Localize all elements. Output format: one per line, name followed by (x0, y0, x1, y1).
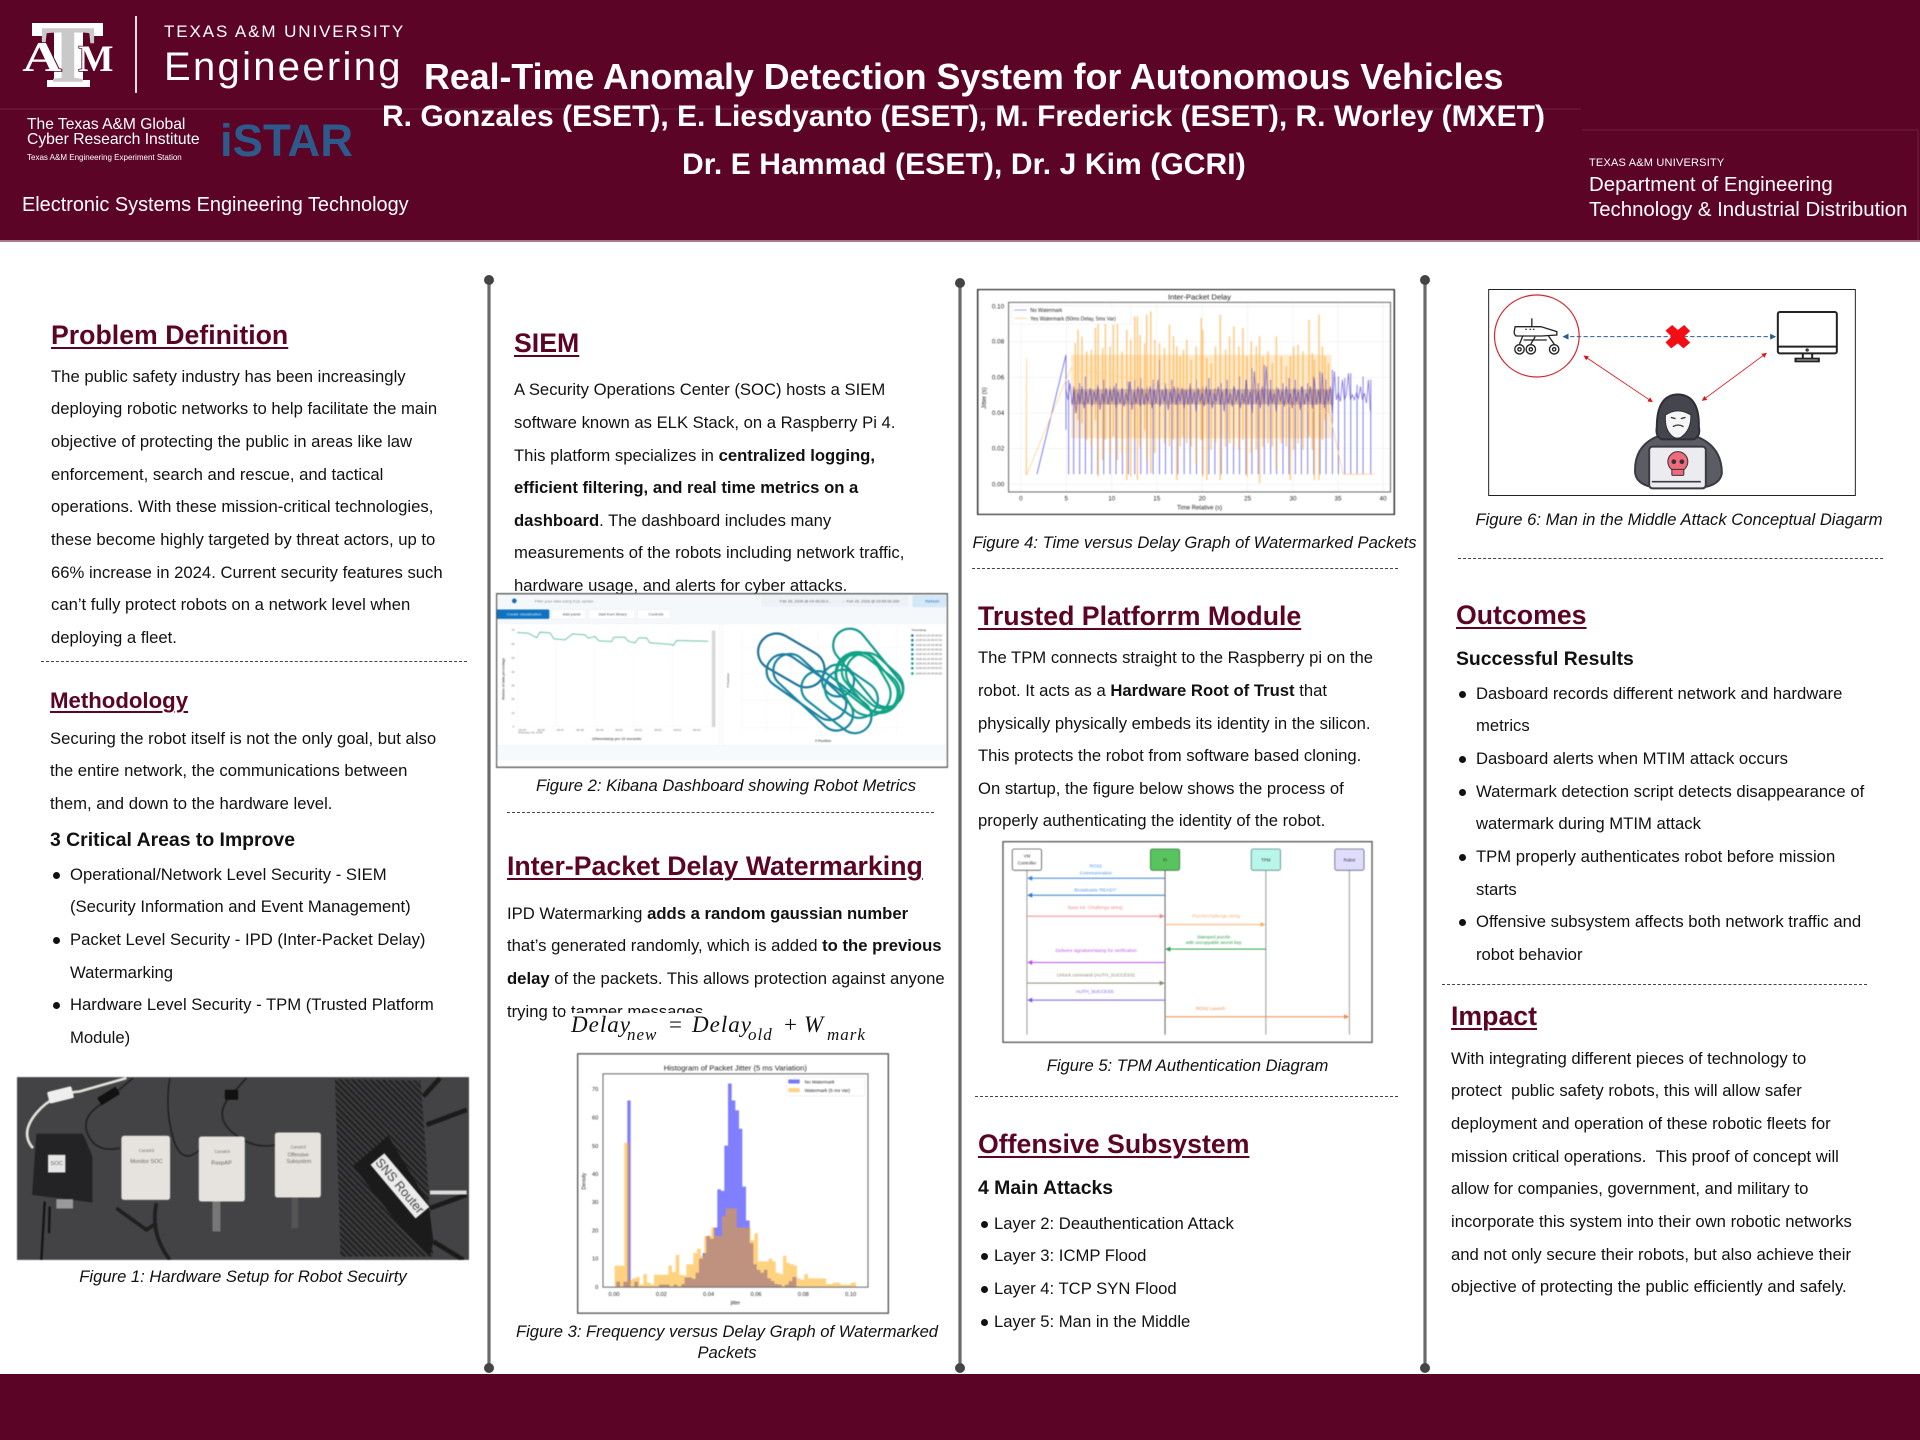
dashboard screenshot: 2026-02-26 09:53:00 (916, 666, 942, 670)
body text: properly authenticating the identity of the robot. (978, 811, 1325, 830)
dashboard screenshot: 09:53 (674, 728, 681, 732)
dashboard screenshot: @timestamp per 10 seconds (592, 737, 641, 741)
body text: 66% increase in 2024. Current security features such (51, 563, 443, 582)
panel: problem definition (51, 320, 443, 647)
icon: monitor (1778, 312, 1837, 361)
dashboard screenshot: February 26, 2026 (518, 730, 543, 734)
body text: efficient filtering, and real time metrics on a (514, 478, 858, 497)
bullet list (53, 865, 434, 1047)
bullet list: starts (1476, 880, 1517, 899)
dashboard screenshot: Feb 26, 2026 @ 09:45:00.0... (780, 599, 832, 604)
dashboard screenshot: 2026-02-26 09:49:00 (916, 648, 942, 652)
body text: operations. With these mission-critical technologies, (51, 497, 433, 516)
heading: Impact (1451, 1001, 1537, 1031)
histogram chart: jitter (730, 1300, 740, 1306)
body text: The public safety industry has been increasingly (51, 367, 406, 386)
equation: old (748, 1025, 773, 1044)
arrow: attacker to monitor (1702, 353, 1766, 400)
bullet list: Watermark detection script detects disappearance of (1476, 782, 1864, 801)
line chart: 35 (1335, 495, 1342, 502)
body text: deployment and operation of these robotic fleets for (1451, 1114, 1831, 1133)
department line: Electronic Systems Engineering Technology (22, 194, 409, 216)
global cyber research institute (27, 116, 200, 162)
bullet list (981, 1214, 1234, 1331)
body text: incorporate this system into their own robotic networks (1451, 1212, 1852, 1231)
photo of hardware: RaspAP (211, 1160, 232, 1166)
line chart: Jitter (s) (982, 387, 988, 409)
dashboard screenshot: 2026-02-26 09:51:00 (916, 657, 942, 661)
dashboard screenshot: 70 (511, 628, 515, 632)
body text (514, 380, 904, 595)
equation: new (627, 1025, 657, 1044)
sequence diagram: Broadcasts 'READY' (1074, 888, 1117, 893)
dashboard screenshot: 09:51 (635, 728, 642, 732)
dashboard screenshot: Refresh (925, 599, 939, 604)
line chart: 0.06 (992, 374, 1005, 381)
body text: protect public safety robots, this will allow safer (1451, 1081, 1802, 1100)
dashboard screenshot: Median of data percentage (502, 658, 506, 700)
sequence diagram: Robot (1344, 857, 1356, 862)
figure 6: man in the middle diagram (1475, 289, 1883, 529)
dashboard screenshot: 0 (513, 724, 515, 728)
figure 5: TPM authentication sequence diagram (1002, 840, 1374, 1075)
photo of hardware: CanaKit (139, 1148, 155, 1153)
body text: deploying robotic networks to help facilitate the main (51, 399, 437, 418)
dashboard screenshot: 09:52 (654, 728, 662, 732)
logo: Texas A&M: M (79, 39, 113, 80)
histogram chart: 0.00 (608, 1292, 620, 1298)
bullet list: Watermarking (70, 963, 173, 982)
dashboard screenshot: Create visualization (507, 612, 541, 617)
body text: With integrating different pieces of technology to (1451, 1049, 1806, 1068)
sequence diagram: VM (1024, 854, 1031, 859)
caption: Figure 4: Time versus Delay Graph of Watermarked Packets (972, 533, 1417, 552)
photo of hardware: CanaKit (214, 1149, 231, 1154)
bullet list: Layer 5: Man in the Middle (994, 1312, 1190, 1331)
heading: SIEM (514, 328, 579, 358)
dashboard screenshot: 09:50 (615, 728, 623, 732)
body text: physically physically embeds its identity in the silicon. (978, 714, 1371, 732)
dashboard screenshot: 30 (511, 683, 515, 687)
histogram chart: 10 (592, 1256, 598, 1262)
icon: hooded attacker with laptop (1635, 394, 1722, 488)
histogram chart: 40 (592, 1172, 598, 1178)
line chart: 20 (1199, 495, 1206, 502)
dashboard screenshot: Add from library (599, 612, 627, 617)
line chart: 40 (1380, 495, 1387, 502)
bullet list: Operational/Network Level Security - SIEM (70, 865, 387, 884)
caption: Figure 6: Man in the Middle Attack Conceptual Diagarm (1475, 510, 1883, 529)
photo of hardware: SOC (51, 1161, 63, 1167)
figure 2: kibana dashboard (495, 592, 949, 795)
histogram chart: 50 (592, 1144, 598, 1150)
dashboard screenshot: 20 (511, 697, 515, 701)
sequence diagram: Controller (1018, 861, 1037, 866)
line chart: 0.08 (992, 339, 1005, 346)
body text: enforcement, search and rescue, and tactical (51, 465, 383, 484)
dashboard screenshot: 2026-02-26 09:50:00 (916, 652, 942, 656)
dashboard screenshot: 09:45 (519, 728, 526, 732)
body text: A Security Operations Center (SOC) hosts a SIEM (514, 380, 885, 399)
caption: Figure 3: Frequency versus Delay Graph of Watermarked (516, 1322, 938, 1341)
heading: Inter-Packet Delay Watermarking (507, 851, 923, 881)
caption: Figure 5: TPM Authentication Diagram (1047, 1056, 1328, 1075)
sequence diagram: Communication (1080, 870, 1112, 875)
panel: SIEM (514, 328, 904, 595)
body text (507, 904, 945, 1021)
bullet list (1459, 684, 1864, 964)
histogram chart: Watermark (5 ms Var) (805, 1088, 850, 1093)
heading: Outcomes (1456, 600, 1587, 630)
histogram chart: No Watermark (805, 1080, 835, 1084)
line chart: 0.10 (992, 303, 1005, 310)
body text: and not only secure their robots, but also achieve their (1451, 1245, 1851, 1264)
column divider 2 (955, 278, 965, 1373)
body text: IPD Watermarking adds a random gaussian number (507, 904, 908, 923)
dashboard screenshot: 2026-02-26 09:48:00 (916, 643, 942, 647)
histogram chart: 30 (592, 1200, 598, 1206)
photo of hardware: Monitor SOC (130, 1159, 163, 1165)
body text: objective of protecting the public efficiently and safely. (1451, 1277, 1847, 1296)
photo of hardware: CanaKit (291, 1144, 307, 1149)
sequence diagram: Puzzle/challenge string (1192, 914, 1241, 919)
bullet list: Layer 3: ICMP Flood (994, 1246, 1146, 1265)
photo of hardware: Subsystem (287, 1159, 311, 1165)
figure 4: inter-packet delay time series (972, 288, 1417, 552)
dashboard screenshot: 09:47 (557, 728, 564, 732)
logo: Texas A&M (22, 20, 113, 90)
arrow: attacker to robot (1584, 356, 1652, 402)
global cyber research institute: The Texas A&M Global (27, 116, 185, 133)
dashboard screenshot: X Position (815, 739, 831, 743)
subheading: 3 Critical Areas to Improve (50, 829, 295, 851)
sequence diagram: AUTH_SUCCESS (1076, 989, 1114, 994)
caption: Figure 1: Hardware Setup for Robot Secuirty (79, 1267, 407, 1286)
department block (1589, 157, 1907, 221)
sequence diagram: with uncopyable secret key (1186, 940, 1242, 945)
line chart: 25 (1244, 495, 1252, 502)
dashboard screenshot: → Feb 26, 2026 @ 09:55:00.000 (841, 599, 900, 604)
column divider 1 (484, 275, 494, 1373)
panel: impact (1451, 1001, 1852, 1296)
bullet list: metrics (1476, 716, 1530, 735)
dashboard screenshot: Y Position (726, 673, 730, 688)
sequence diagram: Pi (1163, 857, 1167, 862)
icon: robot in red circle (1494, 295, 1579, 377)
panel: methodology (50, 688, 436, 1047)
body text: that’s generated randomly, which is added to the previous (507, 936, 942, 955)
body text: robot. It acts as a Hardware Root of Trust that (978, 681, 1327, 700)
equation (565, 1013, 877, 1051)
bullet list: (Security Information and Event Management) (70, 897, 411, 916)
sequence diagram: ROS2 (1089, 863, 1103, 868)
dashboard screenshot: 09:54 (693, 728, 701, 732)
dashboard screenshot: 2026-02-26 09:54:00 (916, 672, 942, 676)
body text: Securing the robot itself is not the only goal, but also (50, 729, 436, 748)
line chart: 30 (1289, 495, 1297, 502)
university name: TEXAS A&M UNIVERSITY (164, 22, 405, 41)
histogram chart: 0.10 (845, 1292, 856, 1298)
line chart: 0.00 (992, 481, 1005, 488)
body text (51, 367, 443, 647)
bullet list: Dasboard alerts when MTIM attack occurs (1476, 749, 1788, 768)
bullet list: Dasboard records different network and hardware (1476, 684, 1842, 703)
body text: On startup, the figure below shows the process of (978, 779, 1344, 798)
photo of hardware (16, 1076, 470, 1261)
department block: Technology & Industrial Distribution (1589, 199, 1907, 221)
iSTAR logo: iSTAR (220, 115, 353, 166)
figure 1: hardware setup (16, 1076, 470, 1286)
caption: Packets (697, 1343, 757, 1362)
line chart: Yes Watermark (50ms Delay, 5ms Var) (1030, 316, 1116, 322)
sequence diagram: ROS2 Launch (1196, 1006, 1226, 1011)
histogram chart: 20 (592, 1228, 598, 1234)
heading: Methodology (50, 688, 188, 713)
sequence diagram (1002, 840, 1374, 1044)
heading: Problem Definition (51, 320, 288, 350)
dashboard screenshot: 09:49 (596, 728, 604, 732)
dashboard screenshot: 10 (511, 711, 515, 715)
line chart: 5 (1065, 495, 1069, 502)
heading: Offensive Subsystem (978, 1129, 1249, 1159)
bullet list: Offensive subsystem affects both network traffic and (1476, 912, 1861, 931)
line chart: Inter-Packet Delay (1168, 292, 1231, 301)
histogram chart: 60 (592, 1116, 598, 1122)
body text (1451, 1049, 1852, 1296)
line chart: No Watermark (1030, 308, 1063, 314)
panel: trusted platform module (978, 601, 1373, 830)
body text: them, and down to the hardware level. (50, 794, 332, 813)
sequence diagram: Base 64: 'Challenge string' (1068, 905, 1123, 910)
department block: Department of Engineering (1589, 174, 1833, 196)
body text: objective of protecting the public in areas like law (51, 432, 412, 451)
dashboard screenshot: 40 (511, 670, 515, 674)
department block: TEXAS A&M UNIVERSITY (1589, 157, 1724, 169)
dashboard screenshot: Controls (649, 612, 663, 617)
line chart: 10 (1108, 495, 1116, 502)
panel: inter-packet delay watermarking (507, 851, 945, 1021)
histogram chart: 0.04 (703, 1292, 714, 1298)
line chart: 0.04 (992, 410, 1005, 417)
bullet list: TPM properly authenticates robot before mission (1476, 847, 1835, 866)
bullet list: Hardware Level Security - TPM (Trusted Platform (70, 995, 434, 1014)
dashboard screenshot: 09:48 (576, 728, 584, 732)
subheading: 4 Main Attacks (978, 1177, 1113, 1199)
equation: mark (827, 1025, 866, 1044)
bullet list: Packet Level Security - IPD (Inter-Packet Delay) (70, 930, 425, 949)
body text: hardware usage, and alerts for cyber attacks. (514, 576, 847, 595)
body text (978, 648, 1373, 830)
body text: can’t fully protect robots on a network level when (51, 595, 410, 614)
arrow: blocked direct link (1564, 335, 1775, 338)
body text: delay of the packets. This allows protection against anyone (507, 969, 945, 988)
body text: allow for companies, government, and military to (1451, 1179, 1808, 1198)
histogram chart: Density (582, 1172, 588, 1190)
footer band (0, 1374, 1920, 1440)
body text: mission critical operations. This proof of concept will (1451, 1147, 1839, 1166)
body text: these become highly targeted by threat actors, up to (51, 530, 435, 549)
panel: outcomes (1456, 600, 1864, 964)
body text: the entire network, the communications between (50, 761, 407, 780)
dashboard screenshot (495, 592, 949, 769)
body text: This platform specializes in centralized logging, (514, 446, 875, 464)
bullet list: Layer 4: TCP SYN Flood (994, 1279, 1177, 1298)
bullet list: Layer 2: Deauthentication Attack (994, 1214, 1234, 1233)
icon: red X (1666, 325, 1690, 348)
dashboard screenshot: 50 (511, 656, 515, 660)
engineering wordmark: Engineering (164, 45, 403, 89)
bullet list: robot behavior (1476, 945, 1582, 964)
sequence diagram: Delivers signature/stamp for verification (1056, 948, 1137, 953)
heading: Trusted Platforrm Module (978, 601, 1301, 631)
subheading: Successful Results (1456, 648, 1634, 670)
attack diagram (1488, 289, 1856, 496)
body text: software known as ELK Stack, on a Raspberry Pi 4. (514, 413, 895, 432)
line chart: 15 (1153, 495, 1161, 502)
photo of hardware: SNS Router (373, 1156, 427, 1216)
histogram chart: 0.06 (750, 1292, 762, 1298)
line chart (976, 288, 1396, 516)
logo: Texas A&M: A (22, 34, 62, 80)
body text: The TPM connects straight to the Raspberry pi on the (978, 648, 1373, 667)
body text: deploying a fleet. (51, 628, 177, 647)
poster title: Real-Time Anomaly Detection System for Autonomous Vehicles (424, 57, 1503, 97)
body text: trying to tamper messages (507, 1002, 703, 1021)
dashboard screenshot: Add panel (563, 612, 581, 617)
line chart: 0.02 (992, 446, 1005, 453)
figure 3: jitter histogram (516, 1052, 938, 1362)
global cyber research institute: Texas A&M Engineering Experiment Station (27, 153, 182, 162)
bullet list: watermark during MTIM attack (1476, 814, 1701, 833)
histogram chart: 0 (595, 1285, 598, 1291)
advisors: Dr. E Hammad (ESET), Dr. J Kim (GCRI) (682, 148, 1246, 180)
histogram chart: 70 (592, 1087, 598, 1093)
header banner (0, 0, 1920, 242)
body text: This protects the robot from software based cloning. (978, 746, 1361, 765)
bullet list: Module) (70, 1028, 130, 1047)
sequence diagram: Stamped puzzle (1197, 935, 1231, 940)
dashboard screenshot: 2026-02-26 09:46:00 (916, 634, 942, 638)
caption (516, 1322, 938, 1362)
body text: dashboard. The dashboard includes many (514, 511, 831, 530)
dashboard screenshot: Filter your data using KQL syntax (535, 599, 593, 604)
dashboard screenshot: 2026-02-26 09:52:00 (916, 662, 942, 666)
global cyber research institute: Cyber Research Institute (27, 131, 200, 148)
line chart: 0 (1019, 495, 1023, 502)
panel: offensive subsystem (978, 1129, 1250, 1331)
column divider 3 (1420, 275, 1430, 1373)
authors: R. Gonzales (ESET), E. Liesdyanto (ESET), M. Frederick (ESET), R. Worley (MXET) (382, 100, 1545, 132)
photo of hardware: Offensive (288, 1152, 309, 1158)
dashboard screenshot: 09:46 (537, 728, 545, 732)
sequence diagram: Unlock command (AUTH_SUCCESS) (1057, 972, 1135, 977)
caption: Figure 2: Kibana Dashboard showing Robot Metrics (536, 776, 916, 795)
histogram chart: Histogram of Packet Jitter (5 ms Variation) (664, 1064, 807, 1072)
dashboard screenshot: Timestamp (911, 628, 927, 632)
histogram chart: 0.02 (656, 1292, 667, 1298)
sequence diagram: TPM (1261, 857, 1271, 862)
body text: measurements of the robots including network traffic, (514, 543, 904, 562)
histogram chart (576, 1052, 890, 1315)
body text (50, 729, 436, 813)
dashboard screenshot: 60 (511, 642, 515, 646)
dashboard screenshot: 2026-02-26 09:47:00 (916, 638, 942, 642)
line chart: Time Relative (s) (1177, 506, 1222, 512)
histogram chart: 0.08 (798, 1292, 809, 1298)
